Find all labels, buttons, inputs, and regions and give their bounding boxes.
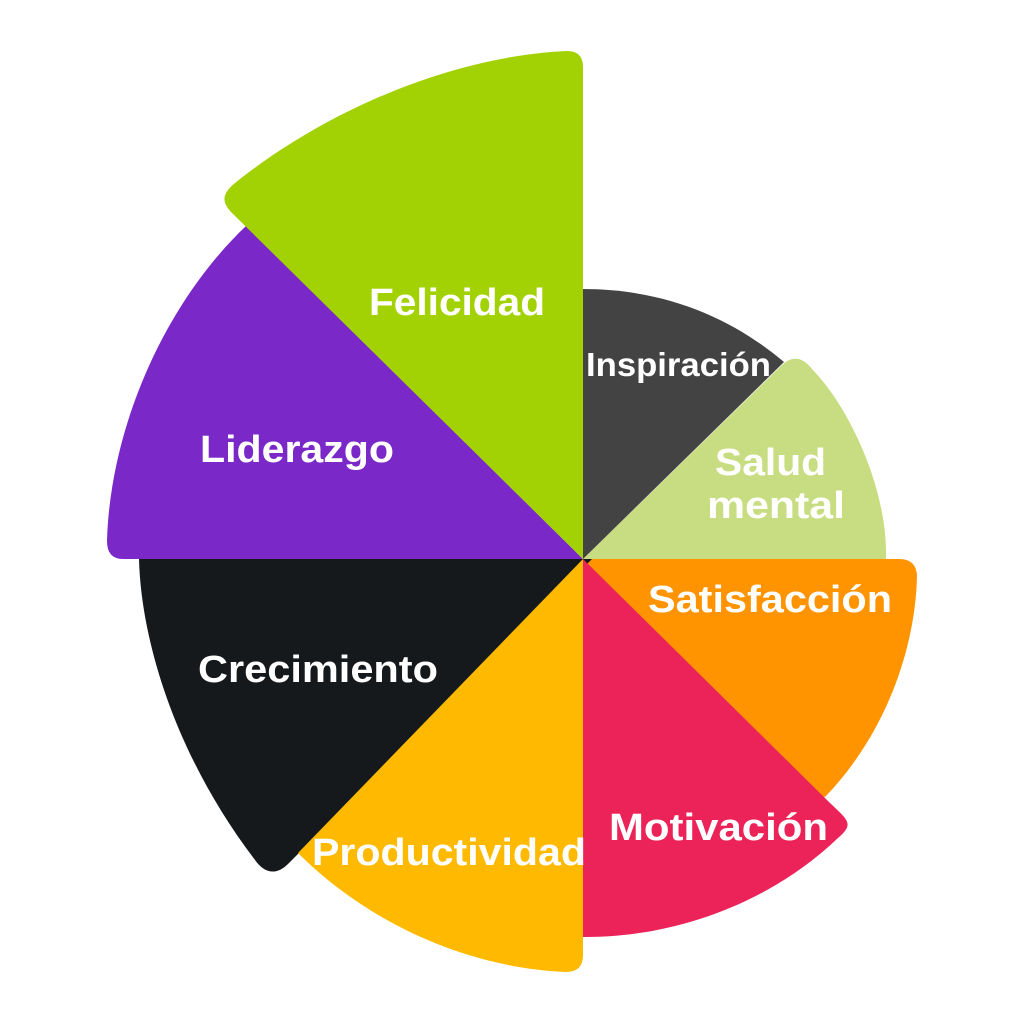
segment: Satisfacción — [583, 559, 917, 797]
segment: Satisfacción: Satisfacción — [648, 579, 892, 621]
segment: Motivación: Motivación — [609, 807, 828, 849]
segment: Inspiración: Inspiración — [586, 346, 771, 383]
segment: Felicidad — [224, 51, 583, 559]
segment: Liderazgo: Liderazgo — [200, 429, 394, 471]
segment: Salud mental: mental — [707, 485, 845, 527]
segment: Crecimiento — [139, 559, 592, 872]
segment: Productividad: Productividad — [312, 832, 586, 874]
segment: Liderazgo — [107, 226, 583, 559]
segment: Salud mental — [583, 359, 886, 559]
segment: Inspiración — [583, 289, 784, 559]
segment: Salud mental: Salud — [715, 442, 826, 484]
segment: Crecimiento: Crecimiento — [198, 649, 438, 691]
segment: Felicidad: Felicidad — [369, 282, 545, 324]
segment: Motivación — [583, 559, 848, 937]
segment: Productividad — [298, 559, 586, 972]
